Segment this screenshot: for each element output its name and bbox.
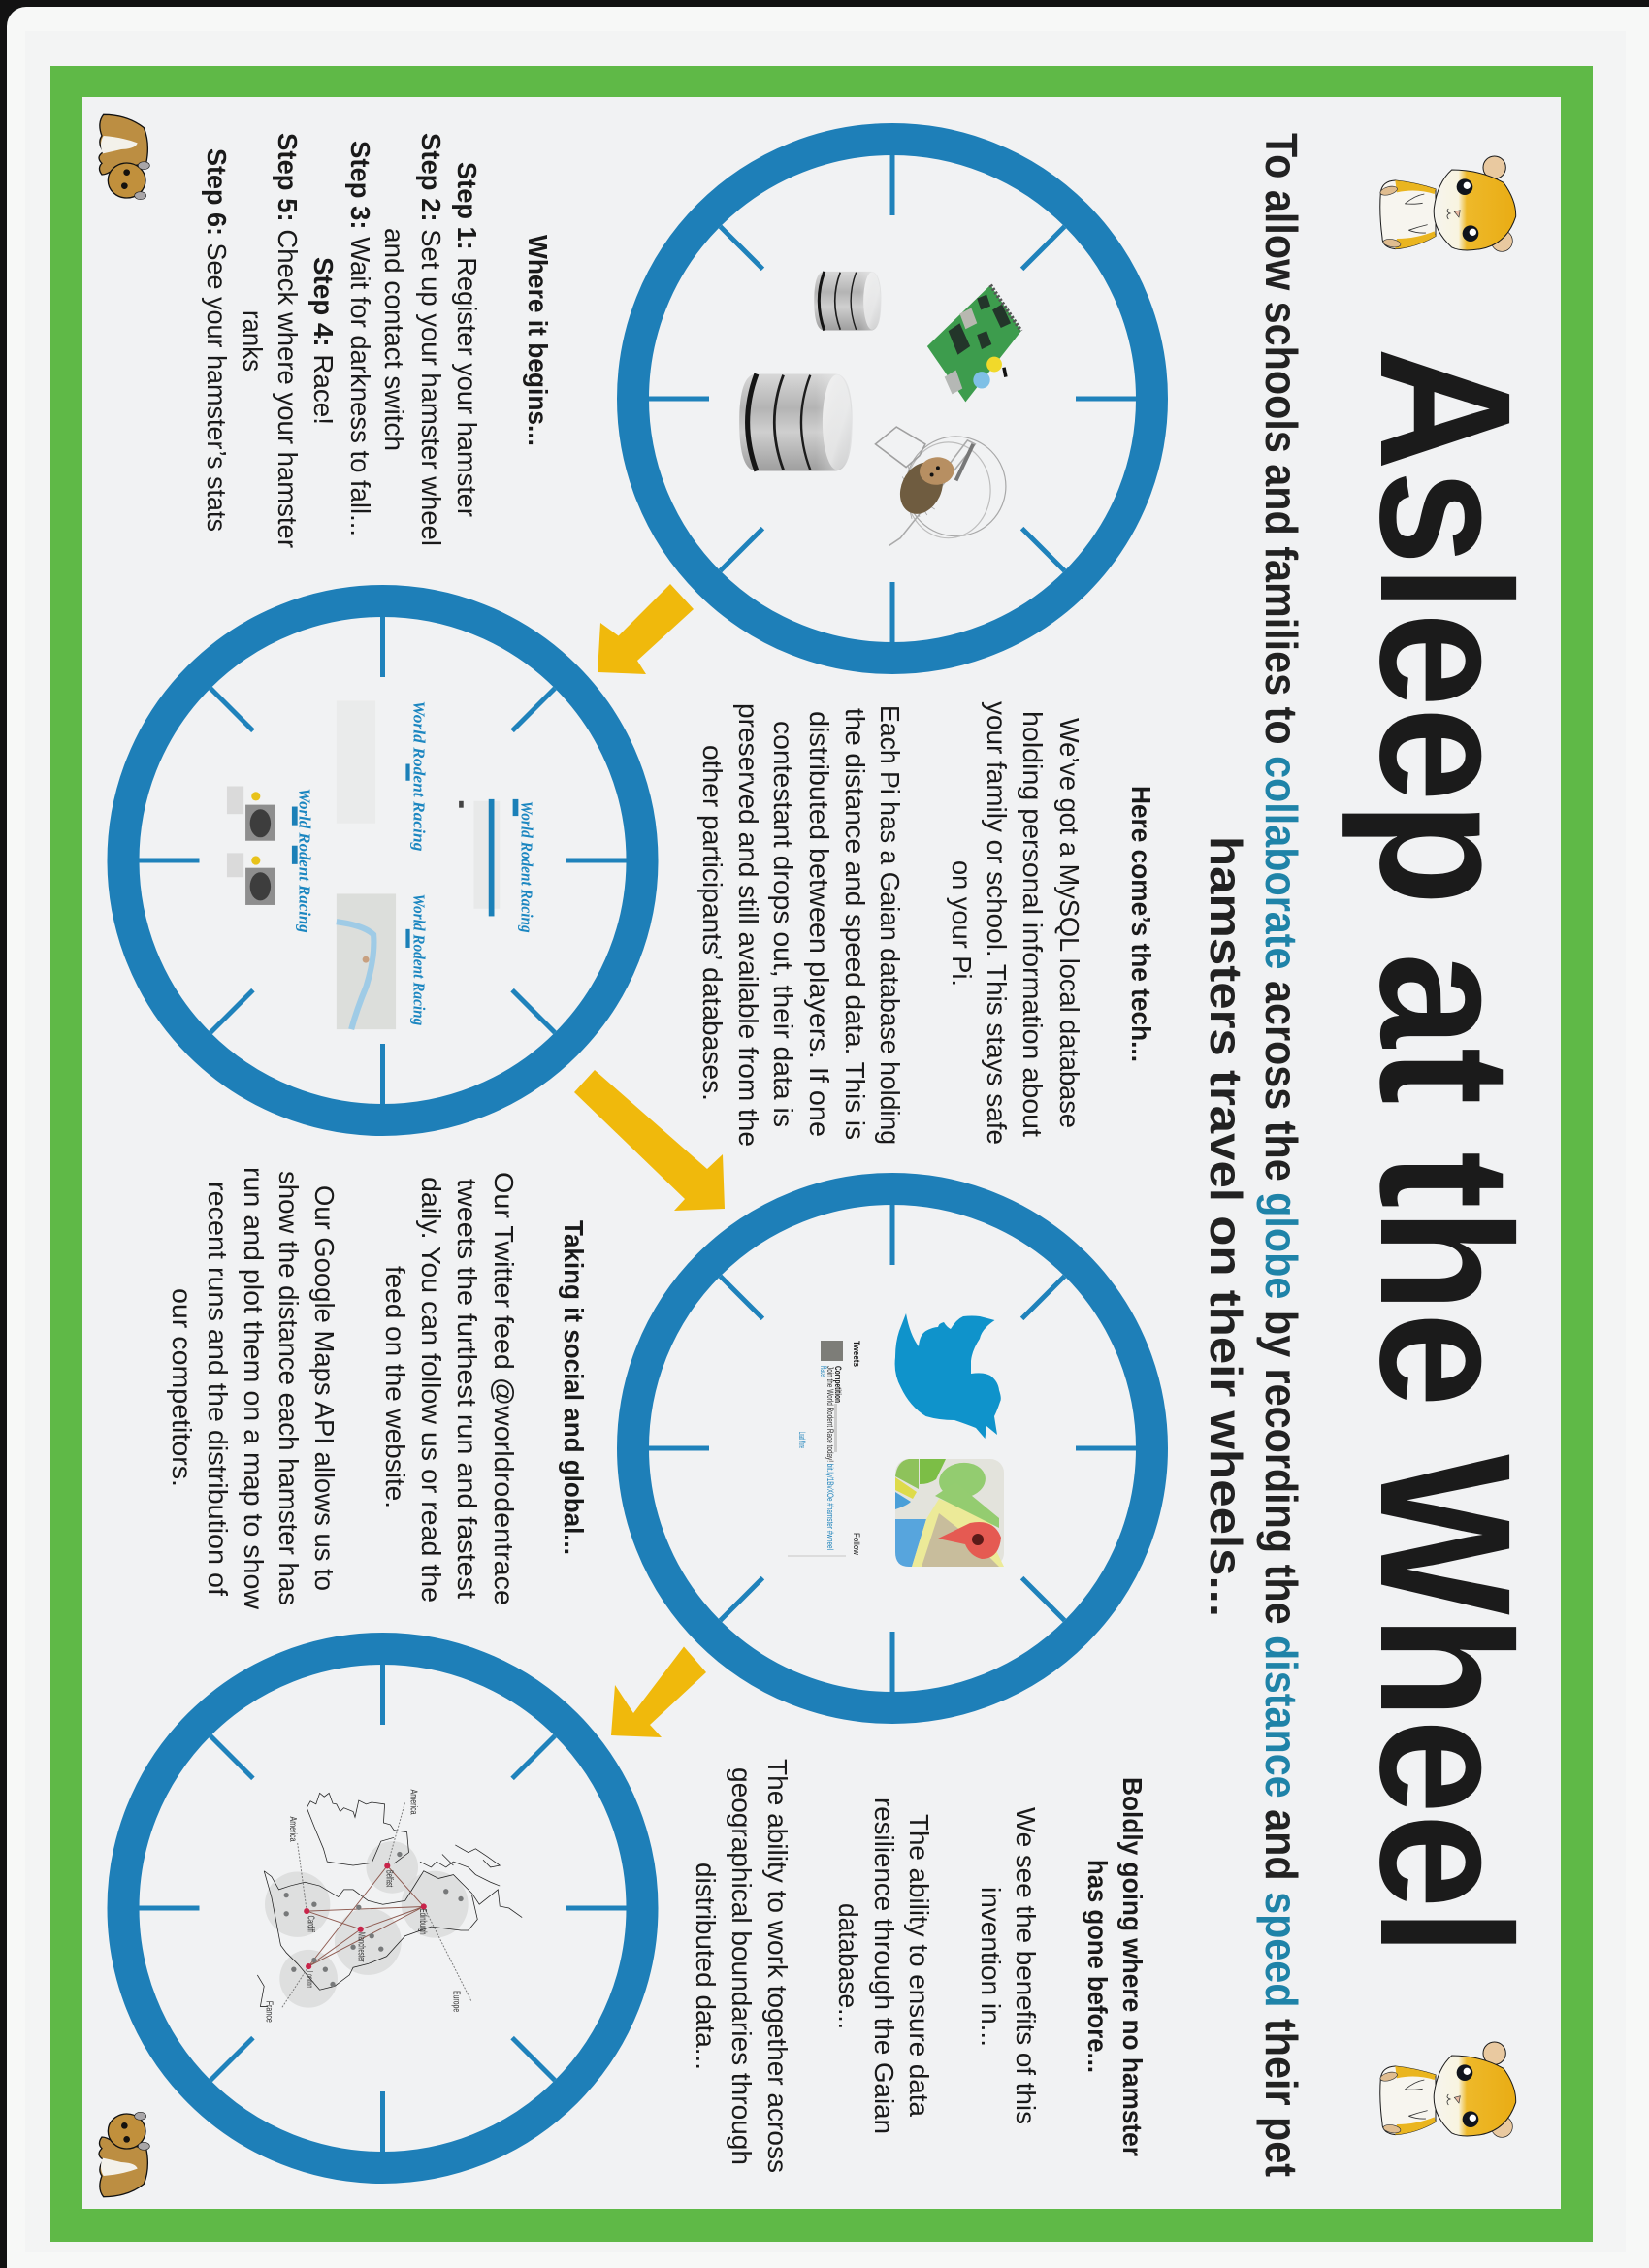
screenshot: tweets: Load More	[797, 1432, 807, 1448]
text block: boldly going: database...	[833, 1903, 863, 2029]
text block: where it begins: Step 5: Check where your hamster	[273, 133, 303, 548]
text block: the tech: holding personal information about	[1018, 711, 1048, 1137]
text block: the tech: We’ve got a MySQL local database	[1054, 718, 1084, 1128]
text block: where it begins: Step 4: Race!	[308, 257, 339, 425]
text block: where it begins: Where it begins...	[523, 235, 553, 446]
map labels: France	[264, 2001, 275, 2023]
subtitle: hamsters travel on their wheels...	[1201, 836, 1251, 1617]
text block: boldly going: We see the benefits of this	[1011, 1807, 1041, 2124]
icon: hamster top	[1379, 156, 1516, 251]
text block: the tech: contestant drops out, their data is	[768, 721, 798, 1127]
text block: social and global: recent runs and the distribution of	[203, 1182, 233, 1596]
text block: social and global: run and plot them on a map to show	[239, 1167, 269, 1610]
map labels: Europe	[450, 1991, 461, 2013]
map labels: America	[287, 1816, 298, 1842]
screenshot: hamster stats	[227, 786, 314, 933]
text block: the tech: other participants’ databases.	[697, 745, 728, 1101]
screenshot: map: World Rodent Racing	[409, 893, 428, 1025]
icon: side hamster bottom	[99, 2112, 149, 2197]
map network links	[307, 1865, 424, 1966]
map nodes	[304, 1863, 427, 1969]
map dashed links	[281, 1802, 471, 2008]
text block: boldly going: resilience through the Gaian	[869, 1798, 899, 2134]
screenshot: leaderboard	[459, 799, 535, 933]
text block: boldly going: has gone before...	[1083, 1860, 1113, 2073]
screenshot: text page	[337, 700, 428, 851]
text block: where it begins: Step 2: Set up your hamster wheel	[416, 133, 446, 546]
subtitle	[1201, 133, 1307, 2177]
screenshot: tweets: Follow	[852, 1533, 861, 1555]
map labels: Edinburgh	[417, 1909, 428, 1935]
text block: social and global: Taking it social and global...	[559, 1220, 589, 1555]
wheel 1: hardware	[632, 140, 1152, 658]
icon: twitter bird	[895, 1313, 1001, 1439]
text block: boldly going: invention in...	[976, 1887, 1006, 2047]
text block: the tech: the distance and speed data. This is	[840, 708, 870, 1140]
map coastline	[257, 1793, 522, 2006]
text block: the tech: Here come’s the tech...	[1126, 786, 1156, 1062]
text block: the tech: distributed between players. If one	[804, 711, 834, 1137]
wheel 4: UK map	[123, 1649, 642, 2167]
text block: where it begins: Step 6: See your hamster’s stats	[202, 148, 232, 532]
map labels: Cardiff	[305, 1916, 315, 1932]
text block: the tech: preserved and still available from the	[733, 703, 763, 1147]
wheel 3: social	[632, 1189, 1152, 1707]
text block: boldly going: distributed data...	[691, 1863, 721, 2070]
screenshot: hamster stats: World Rodent Racing	[296, 788, 314, 933]
text block: where it begins: Step 1: Register your hamster	[452, 162, 482, 517]
text block: the tech: on your Pi.	[947, 860, 977, 987]
text block: social and global: our competitors.	[167, 1288, 197, 1487]
screenshot: map	[337, 893, 428, 1029]
arrow 1	[598, 584, 694, 674]
text block: social and global: tweets the furthest run and fastest	[452, 1179, 482, 1599]
text block: the tech	[697, 701, 1156, 1147]
screenshot: tweets	[788, 1341, 861, 1557]
text block: boldly going: Boldly going where no hamster	[1117, 1777, 1148, 2156]
text block: social and global	[167, 1167, 589, 1610]
text block: where it begins: Step 3: Wait for darkness to fall...	[345, 141, 375, 536]
text block: social and global: daily. You can follow us or read the	[416, 1177, 446, 1603]
text block: social and global: Our Twitter feed @worldrodentrace	[489, 1172, 519, 1605]
wheel 2: website screenshots	[123, 601, 642, 1119]
arrow 3	[611, 1647, 706, 1737]
screenshot: leaderboard: World Rodent Racing	[517, 801, 535, 933]
icon: google maps	[895, 1459, 1004, 1567]
icon: small database	[814, 271, 883, 332]
text block: boldly going: The ability to work together across	[762, 1759, 792, 2173]
text block: social and global: Our Google Maps API allows us to	[309, 1185, 340, 1591]
screenshot: text page: World Rodent Racing	[409, 700, 428, 851]
map labels	[264, 1790, 461, 2023]
icon: raspberry pi	[927, 285, 1021, 402]
screenshot: tweets: Race	[819, 1366, 828, 1377]
text block: boldly going: geographical boundaries through	[727, 1767, 757, 2165]
arrow 2	[574, 1070, 725, 1211]
text block: boldly going: The ability to ensure data	[904, 1814, 934, 2117]
map labels: Manchester	[355, 1932, 366, 1962]
text block: the tech: Each Pi has a Gaian database holding	[875, 705, 905, 1145]
text block: where it begins	[202, 133, 553, 548]
map labels: Belfast	[384, 1870, 395, 1887]
icon: hamster bottom	[1379, 2042, 1516, 2137]
subtitle: To allow schools and families to collaborate across the globe by recording the distance and speed their pet	[1256, 133, 1307, 2177]
text block: social and global: feed on the website.	[380, 1266, 410, 1508]
text block: where it begins: and contact switch	[379, 228, 409, 451]
text block: boldly going	[691, 1759, 1148, 2173]
text block: where it begins: ranks	[238, 310, 268, 372]
map labels: London	[304, 1971, 314, 1988]
icon: large database	[739, 373, 855, 472]
map coverage circles	[265, 1841, 469, 2008]
screenshot: tweets: Competition	[833, 1366, 843, 1403]
map labels: America	[407, 1790, 418, 1815]
title: Asleep at the Wheel	[1342, 347, 1550, 1956]
text block: the tech: your family or school. This stays safe	[982, 701, 1012, 1145]
icon: hamster in wheel	[875, 427, 1006, 546]
text block: social and global: show the distance each hamster has	[274, 1171, 304, 1605]
map small sites	[283, 1852, 464, 1987]
screenshot: tweets: Join the World Rodent Race today! bit.ly/1BvXOe #hamster #wheel	[825, 1366, 835, 1550]
icon: side hamster top	[99, 114, 149, 200]
screenshot: tweets: Tweets	[852, 1341, 861, 1367]
